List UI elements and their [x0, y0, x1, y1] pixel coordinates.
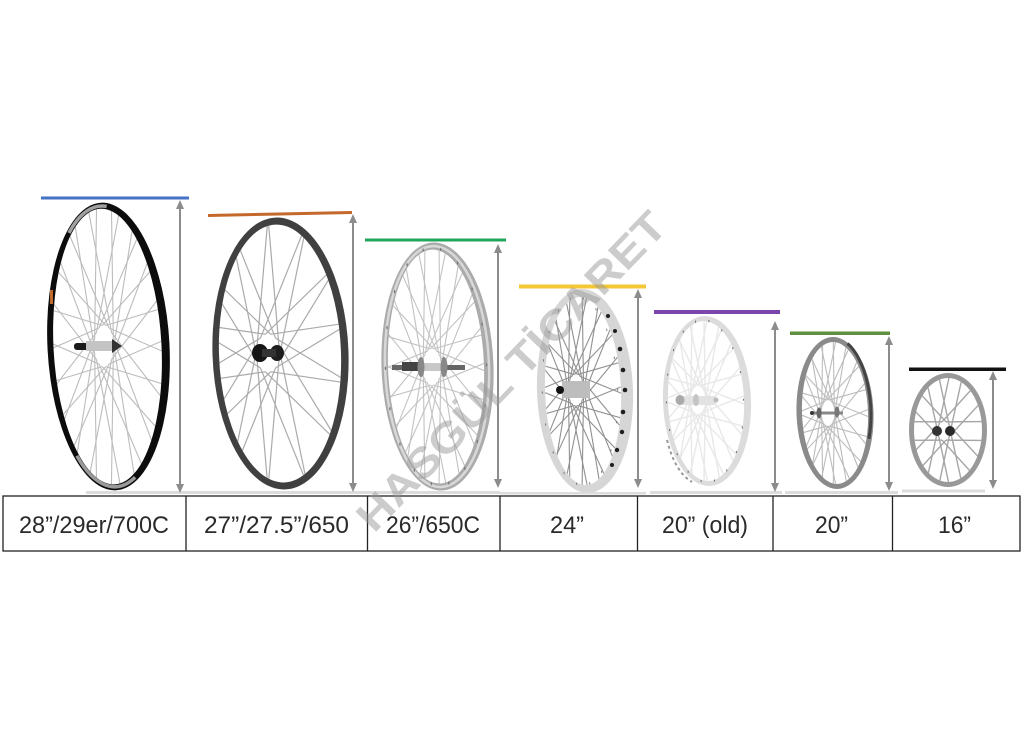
height marker: 20 inch old	[654, 310, 780, 492]
height marker: 28 inch	[41, 196, 189, 493]
height marker: 16 inch	[909, 368, 1006, 489]
size labels: 27”/27.5”/650	[204, 512, 349, 539]
size labels: 20”	[815, 512, 848, 539]
size labels: 28”/29er/700C	[19, 512, 169, 539]
wheel: 20 inch	[796, 337, 874, 489]
size labels	[19, 512, 971, 539]
wheel: 26 inch	[381, 242, 494, 490]
wheel: 27 inch	[212, 218, 349, 490]
watermark: HASGÜL TİCARET	[347, 202, 676, 540]
ground lines under wheels	[86, 490, 985, 494]
size labels: 24”	[550, 512, 584, 539]
size labels: 16”	[938, 512, 971, 539]
height marker: 26 inch	[365, 238, 506, 488]
size labels: 20” (old)	[662, 512, 748, 539]
wheel: 28 inch	[47, 202, 170, 490]
wheel: 16 inch	[909, 373, 987, 487]
height marker: 27 inch	[208, 212, 357, 492]
height marker: 24 inch	[519, 284, 646, 488]
size labels: 26”/650C	[386, 512, 480, 539]
wheel: 20 inch old	[663, 316, 751, 486]
infographic: bicycle wheel size comparison	[2, 196, 1021, 552]
size table	[3, 496, 1020, 551]
wheel: 24 inch	[536, 289, 633, 492]
height marker: 20 inch	[790, 332, 893, 491]
